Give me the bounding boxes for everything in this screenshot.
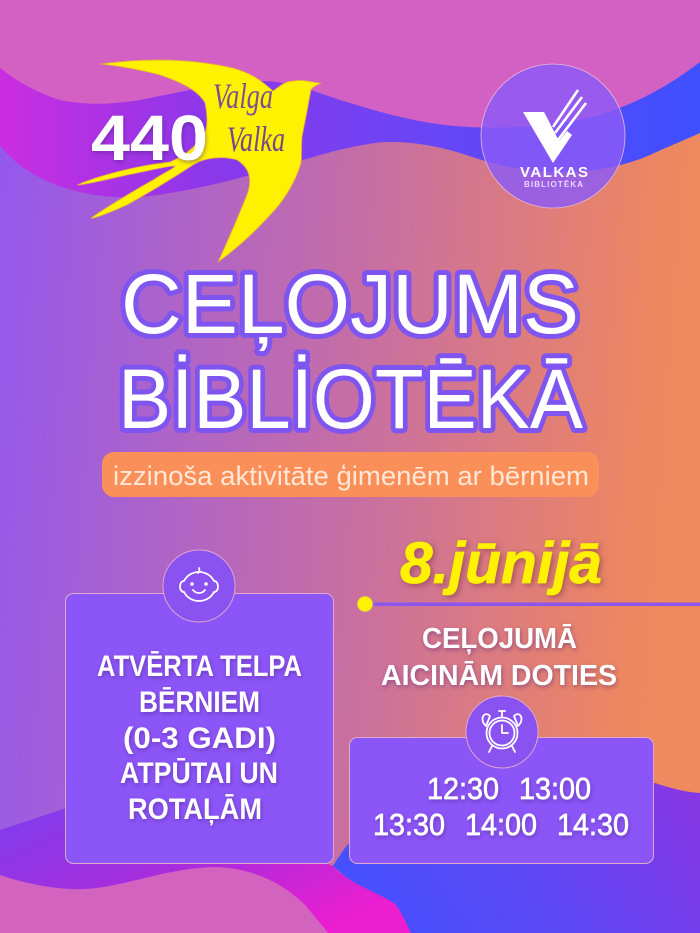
title [118, 257, 583, 446]
swallow logo: 440 Valga Valka [77, 60, 321, 262]
title line 1: CEĻOJUMS [121, 257, 579, 351]
card background [350, 738, 654, 864]
card text [97, 650, 302, 826]
card text: ATVĒRTA TELPA [97, 650, 302, 683]
bottom left wave [0, 790, 411, 933]
icon circle: baby [163, 550, 235, 622]
times [373, 771, 629, 842]
date: 8.jūnijā [400, 531, 602, 596]
panel: session times [350, 696, 654, 864]
times: 14:30 [557, 807, 629, 842]
times: 13:00 [519, 771, 591, 806]
card text: ROTAĻĀM [128, 793, 262, 826]
logo word VALKAS: VALKAS [520, 164, 588, 181]
top pink area [0, 0, 700, 128]
times: 14:00 [465, 807, 537, 842]
script label Valka: Valka [227, 119, 285, 159]
invitation heading [381, 623, 617, 692]
top wave band [0, 50, 700, 197]
times: 12:30 [427, 771, 499, 806]
card text: (0-3 GADI) [123, 722, 276, 755]
logo word BIBLIOTEKA: BIBLIOTĒKA [524, 180, 583, 189]
times: 13:30 [373, 807, 445, 842]
icon: V mark [523, 90, 586, 163]
logo circle [481, 64, 625, 208]
icon circle: alarm clock [466, 696, 538, 768]
icon: yellow swallow [77, 60, 321, 262]
panel: open room for children [66, 550, 334, 864]
card background [66, 594, 334, 864]
bottom pink blob [0, 867, 328, 933]
invitation heading: CEĻOJUMĀ [422, 623, 577, 655]
title line 2: BİBLİOTĒKĀ [118, 352, 583, 446]
subtitle pill [102, 452, 599, 497]
card text: BĒRNIEM [139, 686, 260, 719]
Valkas library logo [481, 64, 625, 208]
script label Valga: Valga [213, 76, 273, 116]
bottom right wave [333, 780, 700, 933]
number 440: 440 [91, 102, 208, 174]
subtitle pill: izzinoša aktivitāte ģimenēm ar bērniem [113, 461, 589, 491]
invitation heading: AICINĀM DOTIES [381, 660, 617, 692]
date line with dot [357, 596, 700, 612]
card text: ATPŪTAI UN [120, 757, 278, 790]
